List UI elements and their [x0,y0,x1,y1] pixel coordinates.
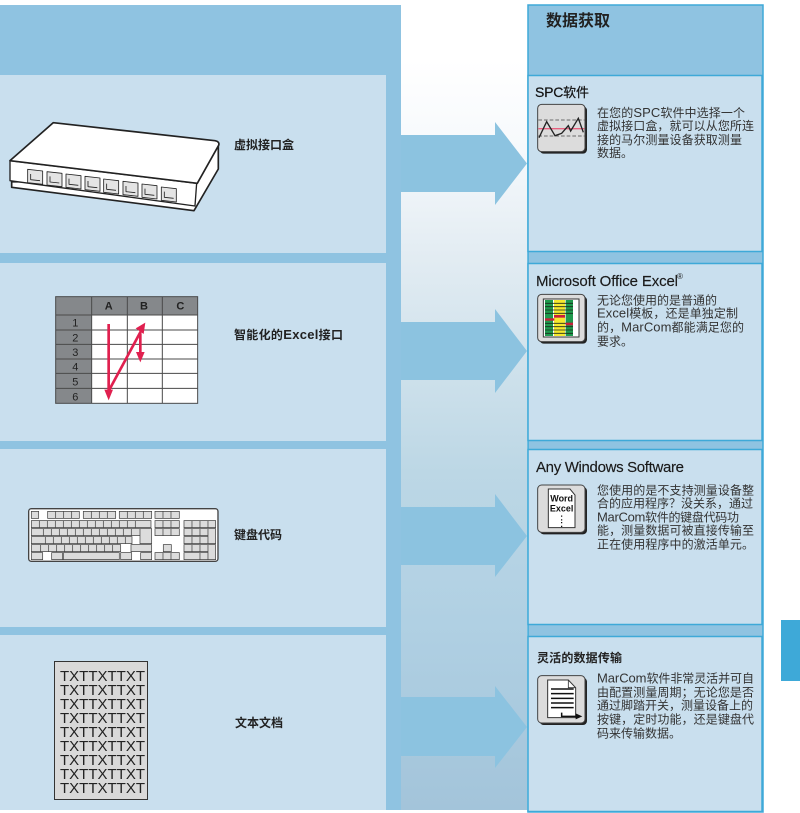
arrow 2 [401,309,527,393]
description: any software: 能，测量数据可被直接传输至 [597,522,754,538]
description: data transfer: 按键，定时功能，还是键盘代 [597,712,754,726]
description: data transfer [597,670,754,740]
description: Excel: 的，MarCom都能满足您的 [597,320,744,334]
description: any software: 正在使用程序中的激活单元。 [597,536,754,552]
description: data transfer: 通过脚踏开关，测量设备上的 [597,698,753,712]
icon: spreadsheet with arrows [56,297,198,404]
right panel: flexible data transfer [528,636,762,812]
description: Excel: 要求。 [597,334,633,348]
description: SPC software: 虚拟接口盒，就可以从您所连 [597,118,754,133]
icon: document with arrow [538,676,587,725]
icon: text document: TXTTXTTXT [60,738,145,755]
icon: spreadsheet with arrows: C [176,300,184,312]
description: data transfer: MarCom软件非常灵活并可自 [597,670,754,686]
icon: Word and Excel document: : [560,519,563,529]
description: data transfer: 码来传输数据。 [597,726,681,740]
icon: spreadsheet with arrows: A [105,300,113,312]
icon: text document: TXTTXTTXT [60,710,145,727]
icon: Excel sheet [538,294,587,344]
description: data transfer: 由配置测量周期；无论您是否 [597,684,754,700]
icon: keyboard [29,509,218,561]
left panel: Excel interface [0,263,386,441]
description: SPC software: 数据。 [597,145,633,160]
description: Excel: 无论您使用的是普通的 [597,292,717,308]
icon: text document: TXTTXTTXT [60,682,145,699]
description: Excel [597,292,744,348]
label: virtual interface box: 虚拟接口盒 [234,137,294,152]
label: keyboard code: 键盘代码 [234,527,282,542]
side tab [781,620,800,681]
heading: flexible data transfer: 灵活的数据传输 [537,650,622,665]
right panel: Microsoft Office Excel [528,264,762,440]
right panel: SPC software [528,76,762,252]
arrow 3 [401,494,527,577]
icon: spreadsheet with arrows: 5 [72,376,78,388]
icon: text document: TXTTXTTXT [60,780,145,797]
arrow 1 [401,122,527,205]
description: SPC software: 在您的SPC软件中选择一个 [597,105,745,120]
icon: text document: TXTTXTTXT [60,752,145,769]
icon: spreadsheet with arrows: 3 [72,347,78,359]
label: text document: 文本文档 [235,715,283,730]
icon: spreadsheet with arrows: 4 [72,362,78,374]
right panel: Any Windows Software [528,450,762,624]
icon: text document: TXTTXTTXT [60,724,145,741]
icon: Word and Excel document [538,485,587,534]
icon: text document [54,662,148,800]
left panel: virtual interface box [0,75,386,253]
icon: spreadsheet with arrows: B [140,300,148,312]
description: any software: 合的应用程序？没关系，通过 [597,496,753,510]
description: SPC software [597,105,754,160]
registered mark: ® [677,272,683,281]
description: SPC software: 接的马尔测量设备获取测量 [597,132,742,147]
icon: text document: TXTTXTTXT [60,668,145,685]
icon: interface box hardware [10,123,219,211]
icon: spreadsheet with arrows: 2 [72,332,78,344]
description: any software: 您使用的是不支持测量设备整 [597,482,754,498]
left panel: text document [0,635,386,810]
icon: text document: TXTTXTTXT [60,766,145,783]
icon: spreadsheet with arrows: 1 [72,318,78,330]
right column [528,5,763,812]
left column [0,5,401,810]
icon: text document: TXTTXTTXT [60,696,145,713]
description: any software [597,482,754,552]
heading: data acquisition: 数据获取 [546,12,610,30]
icon: Word and Excel document: Word [550,494,573,504]
heading: Microsoft Office Excel: Microsoft Office Excel [536,273,678,290]
icon: Word and Excel document: Excel [550,504,573,514]
icon: control chart [538,104,587,154]
icon: Word and Excel document: : [560,512,563,522]
icon: spreadsheet with arrows: 6 [72,392,78,404]
gradient background between columns [401,60,527,810]
description: any software: MarCom软件的键盘代码功 [597,510,739,524]
heading: SPC software: SPC软件 [535,84,589,100]
arrow 4 [401,686,527,768]
label: smart Excel interface: 智能化的Excel接口 [234,327,343,342]
description: Excel: Excel模板，还是单独定制 [597,306,738,320]
left panel: keyboard code [0,449,386,627]
heading: Any Windows Software: Any Windows Software [536,459,684,476]
